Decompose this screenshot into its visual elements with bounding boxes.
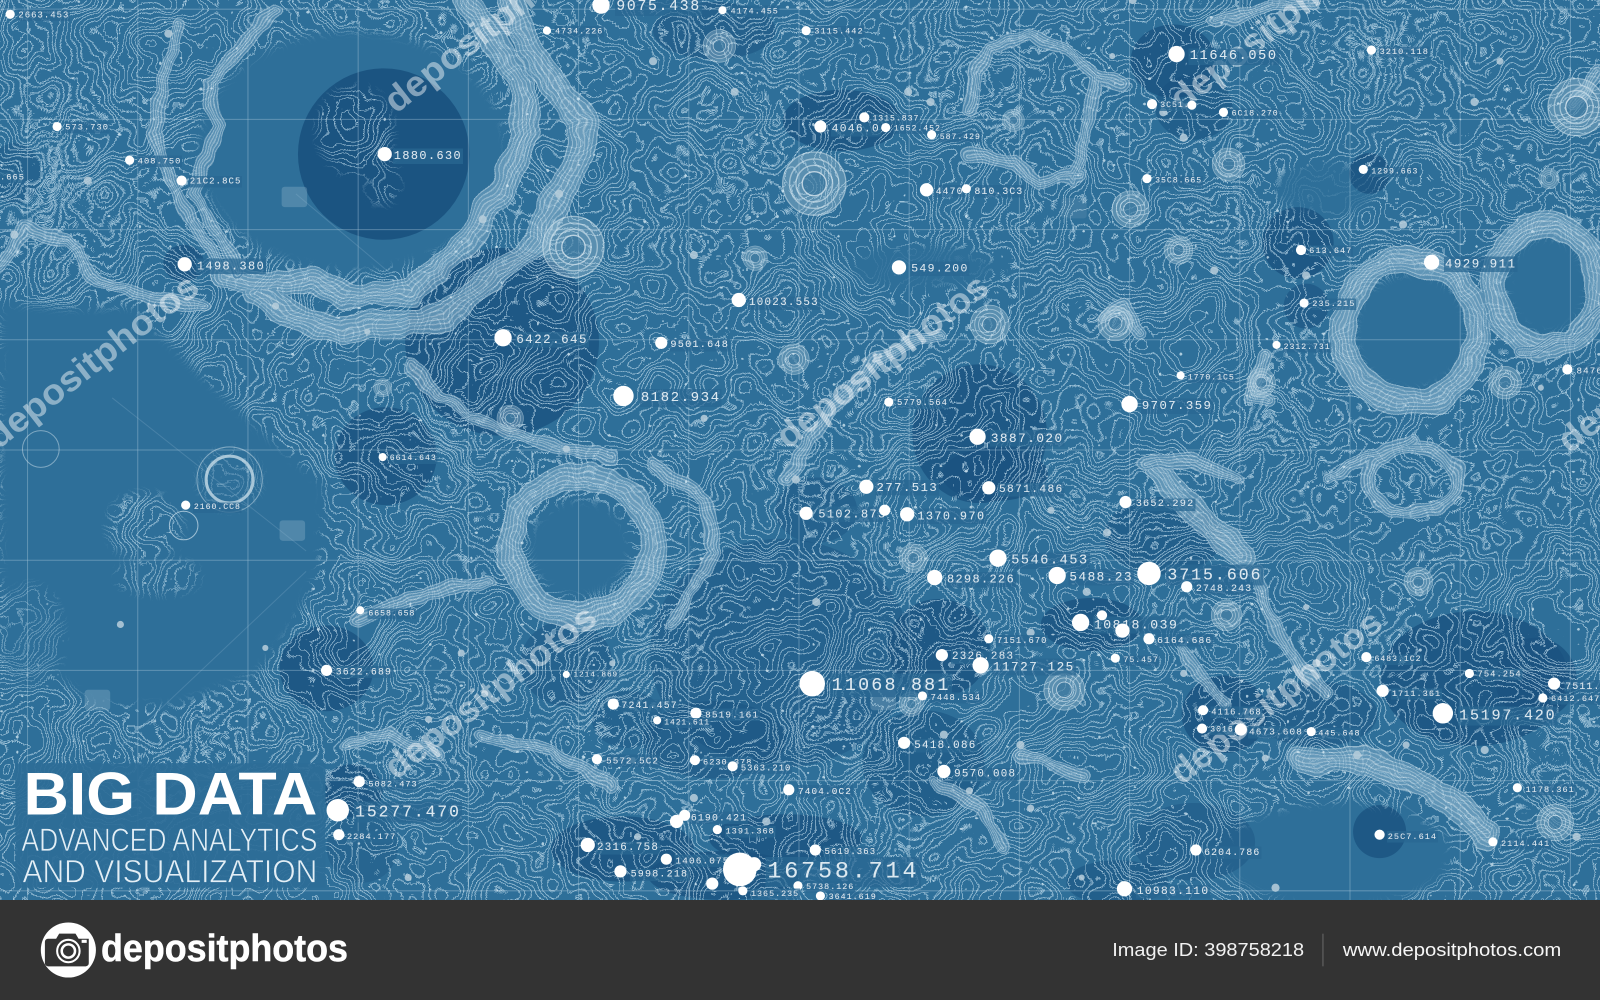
point 5363.210: 5363.210 — [741, 763, 791, 773]
point 3C51.5C51: 3C51.5 — [1160, 101, 1195, 110]
point 1370.970: 1370.970 — [917, 509, 986, 523]
point 16758.714: 16758.714 — [767, 859, 919, 886]
point 3622.689: 3622.689 — [336, 666, 392, 677]
point 1406.075: 1406.075 — [676, 855, 730, 866]
point 6190.421 — [670, 810, 747, 828]
title panel — [15, 760, 326, 890]
point 4734.226: 4734.226 — [555, 27, 603, 37]
point 3622.689 — [321, 665, 392, 677]
point 2284.177 — [333, 829, 396, 842]
point 6658.658 — [356, 606, 415, 618]
point 1299.663: 1299.663 — [1371, 167, 1418, 176]
point 3652.292 — [1119, 496, 1194, 510]
point 573.730: 573.730 — [65, 123, 109, 133]
point 5871.486 — [982, 481, 1064, 496]
title: BIG DATA: BIG DATA — [23, 760, 317, 827]
point 11068.881: 11068.881 — [832, 675, 951, 696]
point 445.648 — [1307, 727, 1361, 739]
point 7404.0C2: 7404.0C2 — [798, 786, 852, 797]
point 1365.235 — [738, 886, 799, 899]
point 5572.5C2: 5572.5C2 — [606, 755, 659, 766]
point 15277.470: 15277.470 — [355, 802, 461, 821]
point 6204.786 — [1190, 844, 1260, 858]
point 754.254: 754.254 — [1478, 670, 1522, 680]
point 4046.0: 4046.0 — [832, 124, 880, 136]
point 1421.611: 1421.611 — [664, 718, 710, 727]
point 587.429 — [927, 130, 981, 142]
icon: camera logo — [41, 922, 96, 978]
point 3115.442: 3115.442 — [814, 27, 864, 37]
point 1391.368: 1391.368 — [726, 827, 775, 837]
point 2748.243 — [1181, 581, 1252, 594]
point 1711.361 — [1377, 685, 1441, 699]
point 6658.658: 6658.658 — [368, 609, 415, 618]
divider — [1322, 934, 1323, 966]
point 10983.110: 10983.110 — [1137, 886, 1209, 898]
point 2114.441 — [1488, 837, 1550, 849]
point 6483.1C2: 6483.1C2 — [1374, 655, 1421, 664]
point 9570.008 — [937, 765, 1016, 781]
point 3887.020: 3887.020 — [991, 431, 1064, 446]
watermark: depositphotos diagonals — [0, 0, 1600, 792]
point 4116.768 — [1198, 705, 1262, 717]
point 2316.758: 2316.758 — [597, 842, 659, 854]
point 2312.731 — [1272, 341, 1331, 352]
point 8298.226: 8298.226 — [947, 573, 1015, 587]
point 5418.086: 5418.086 — [914, 740, 977, 752]
point 3715.606: 3715.606 — [1167, 566, 1263, 585]
point 7511: 7511. — [1565, 681, 1600, 692]
point 5082.473: 5082.473 — [368, 780, 418, 790]
point 2312.731: 2312.731 — [1284, 343, 1331, 352]
watermark: depositphotos diagonals: depositphotos — [1162, 602, 1390, 792]
point 10023.553: 10023.553 — [749, 297, 819, 309]
point 4116.768: 4116.768 — [1211, 707, 1262, 717]
point 1652.452: 1652.452 — [894, 125, 941, 134]
point 1299.663 — [1359, 165, 1418, 176]
point 9501.648 — [655, 337, 729, 351]
point 5998.218: 5998.218 — [631, 870, 688, 881]
crater ring left plain — [22, 431, 262, 540]
point 8519.161: 8519.161 — [705, 709, 759, 720]
point 6422.645 — [494, 329, 588, 347]
point 7404.0C2 — [783, 784, 852, 797]
website: www.depositphotos.com — [1342, 939, 1561, 960]
point 2160.CC8 — [181, 501, 241, 512]
point 8182.934: 8182.934 — [641, 390, 721, 406]
point 5619.363: 5619.363 — [824, 847, 876, 857]
point 10983.110 — [1117, 881, 1209, 898]
point 6614.643: 6614.643 — [390, 454, 437, 463]
point 2 — [706, 878, 718, 890]
point 11727.125: 11727.125 — [993, 659, 1075, 674]
point 5488.23 — [1048, 567, 1133, 585]
point C51 — [1187, 101, 1196, 110]
point 6230.378: 6230.378 — [703, 757, 752, 767]
point 5102.873: 5102.873 — [818, 507, 887, 521]
point 1178.361 — [1513, 783, 1575, 795]
point 1365.235: 1365.235 — [751, 889, 799, 899]
point 3887.020 — [969, 429, 1064, 446]
point 3016 — [1197, 723, 1234, 735]
point 8298.226 — [927, 570, 1015, 587]
point 408.750: 408.750 — [138, 156, 181, 166]
point 1770.1C5: 1770.1C5 — [1188, 374, 1235, 383]
point 6483.1C2 — [1361, 652, 1421, 664]
point 277.513: 277.513 — [877, 481, 938, 495]
point 7511 — [1548, 678, 1600, 692]
point 4174.455: 4174.455 — [731, 6, 779, 16]
point 3715.606 — [1137, 562, 1263, 585]
point 549.200: 549.200 — [911, 262, 969, 275]
point cluster near 10818 — [1097, 610, 1130, 638]
point 1178.361: 1178.361 — [1526, 785, 1575, 795]
point 7151.670 — [984, 634, 1047, 646]
point 4673.608 — [1235, 723, 1303, 738]
point 5488.23: 5488.23 — [1069, 570, 1133, 585]
point 4929.911: 4929.911 — [1445, 257, 1517, 271]
point 1880.630: 1880.630 — [394, 149, 462, 163]
point 4929.911 — [1424, 255, 1517, 271]
point 5998.218 — [614, 865, 688, 881]
point 11646.050: 11646.050 — [1190, 49, 1278, 64]
point 1498.380: 1498.380 — [197, 259, 265, 273]
point 6164.686 — [1143, 633, 1212, 646]
point 2663.453: 2663.453 — [18, 10, 69, 20]
point 15197.420: 15197.420 — [1459, 707, 1556, 724]
image id: Image ID: 398758218 — [1112, 939, 1304, 960]
point 587.429: 587.429 — [940, 133, 981, 142]
point 7448.534 — [918, 691, 981, 703]
point 6C18.270: 6C18.270 — [1232, 109, 1279, 118]
point 21C2.8C5: 21C2.8C5 — [190, 177, 241, 187]
point 25C7.614: 25C7.614 — [1388, 832, 1437, 842]
point 6422.645: 6422.645 — [516, 333, 588, 347]
point .665: .665 — [0, 173, 25, 183]
point 549.200 — [892, 260, 969, 275]
point 5363.210 — [728, 761, 791, 773]
point 6190.421: 6190.421 — [691, 812, 747, 823]
point 9501.648: 9501.648 — [670, 340, 729, 351]
point 9707.359: 9707.359 — [1142, 399, 1212, 413]
point 9570.008: 9570.008 — [954, 769, 1016, 781]
point 1770.1C5 — [1177, 371, 1235, 383]
point 25C7.614 — [1374, 830, 1437, 842]
point 15197.420 — [1433, 703, 1556, 724]
point 7241.457: 7241.457 — [621, 700, 678, 711]
point 5546.453 — [989, 549, 1089, 568]
point 2326.283 — [936, 649, 1014, 663]
point 6C18.270 — [1219, 108, 1279, 118]
footer bar — [0, 900, 1600, 1000]
point 3652.292: 3652.292 — [1136, 499, 1194, 510]
point 4470 — [920, 183, 964, 197]
brand wordmark: depositphotos — [101, 927, 348, 969]
point 3641.619: 3641.619 — [829, 892, 877, 902]
point 35C8.665 — [1142, 174, 1202, 186]
point 5546.453: 5546.453 — [1011, 553, 1089, 568]
point 4470: 4470 — [936, 186, 964, 197]
point 2114.441: 2114.441 — [1501, 839, 1550, 849]
point 11646.050 — [1168, 46, 1278, 64]
subtitle line 2: AND VISUALIZATION — [22, 853, 317, 890]
watermark: faint camera icons — [85, 187, 1087, 710]
point 1406.075 — [661, 854, 730, 866]
point 16758.714 — [723, 853, 919, 886]
point 5619.363 — [810, 844, 876, 857]
point 75.457 — [1111, 654, 1159, 665]
point 2748.243: 2748.243 — [1196, 583, 1252, 594]
point 235.215: 235.215 — [1312, 299, 1355, 309]
point 2316.758 — [581, 838, 659, 854]
point 7448.534: 7448.534 — [931, 693, 981, 703]
point 2326.283: 2326.283 — [952, 651, 1014, 663]
point 3C51.5C51 — [1147, 99, 1195, 110]
point 4046.0 — [814, 120, 880, 136]
point 8476 — [1562, 364, 1600, 376]
point 8519.161 — [690, 708, 759, 720]
point 810.3C3: 810.3C3 — [974, 186, 1023, 197]
point 8182.934 — [613, 386, 721, 406]
point 7241.457 — [608, 698, 678, 711]
subtitle line 1: ADVANCED ANALYTICS — [21, 821, 317, 858]
point 6412.647: 6412.647 — [1551, 694, 1600, 704]
point 6204.786: 6204.786 — [1204, 847, 1260, 858]
point 11068.881 — [799, 671, 951, 696]
crater target rings — [373, 30, 1600, 841]
point 1391.368 — [713, 825, 775, 837]
point 5779.564: 5779.564 — [897, 398, 948, 408]
point 1880.630 — [378, 147, 462, 163]
point 2284.177: 2284.177 — [347, 832, 396, 842]
point 5082.473 — [354, 776, 418, 790]
point 15277.470 — [327, 799, 461, 821]
point 613.647: 613.647 — [1309, 246, 1352, 256]
point 4673.608: 4673.608 — [1249, 727, 1303, 738]
point 1315.837 — [859, 112, 919, 123]
point 6164.686: 6164.686 — [1157, 635, 1212, 646]
point 10818.039 — [1072, 614, 1178, 633]
point 1315.837: 1315.837 — [872, 114, 919, 123]
point 10023.553 — [732, 293, 819, 309]
point 5418.086 — [898, 737, 977, 752]
point 11727.125 — [972, 657, 1075, 674]
point 810.3C3 — [962, 184, 1023, 197]
point 3210.118: 3210.118 — [1380, 47, 1429, 57]
point 3016: 3016 — [1210, 726, 1234, 735]
point 445.648: 445.648 — [1318, 729, 1361, 739]
watermark: depositphotos diagonals: depositphotos — [376, 596, 604, 787]
point 1370.970 — [879, 505, 986, 523]
point 10818.039: 10818.039 — [1094, 618, 1178, 633]
point 9707.359 — [1121, 396, 1212, 413]
point 35C8.665: 35C8.665 — [1155, 177, 1202, 186]
point 1652.452 — [881, 123, 941, 134]
point 1711.361: 1711.361 — [1392, 689, 1441, 699]
watermark: depositphotos diagonals: depositphotos — [768, 266, 996, 456]
point 7151.670: 7151.670 — [997, 636, 1047, 646]
point 6230.378 — [690, 755, 752, 767]
point 1421.611 — [653, 716, 710, 727]
point 5738.126: 5738.126 — [806, 882, 854, 892]
point 3210.118 — [1367, 45, 1429, 57]
point 1498.380 — [178, 257, 265, 273]
point 613.647 — [1296, 245, 1352, 256]
point 5871.486: 5871.486 — [999, 484, 1064, 496]
point 75.457: 75.457 — [1123, 656, 1159, 665]
point 2160.CC8: 2160.CC8 — [194, 503, 241, 512]
point 1214.869: 1214.869 — [573, 672, 618, 680]
